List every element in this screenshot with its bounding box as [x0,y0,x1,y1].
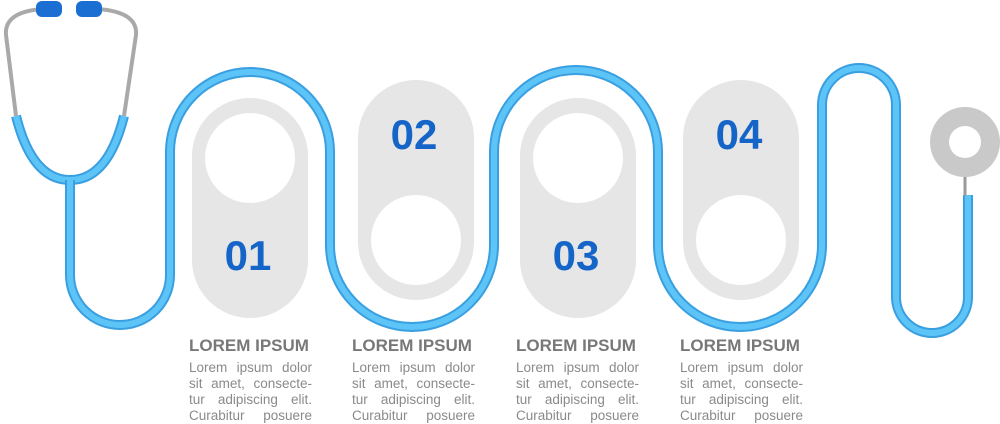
text block 4: Lorem [680,360,718,375]
text block 3 [516,336,639,423]
text block 1: sit [189,376,202,391]
text block 3: adipiscing [545,392,605,407]
stethoscope tube [70,68,968,333]
pill 4: 04 [716,111,763,158]
text block 4: dolor [773,360,803,375]
text block 2: ipsum [400,360,436,375]
text block 4: LOREM IPSUM [680,336,800,355]
text block 1: LOREM IPSUM [189,336,309,355]
text block 4 [680,336,803,423]
text block 3: elit. [618,392,639,407]
text block 4: sit [680,376,694,391]
pill 1: 01 [225,232,271,279]
text block 4: consecte- [744,376,803,391]
text block 2: elit. [454,392,475,407]
text block 3: posuere [590,408,639,423]
text block 4: ipsum [728,360,764,375]
text block 2: consecte- [416,376,475,391]
text block 1: adipiscing [218,392,278,407]
text block 1: consecte- [253,376,312,391]
pill 2 [358,80,474,300]
text block 1: Lorem [189,360,227,375]
pill 4 [683,80,799,300]
text block 4: posuere [754,408,803,423]
text block 1: amet, [211,376,245,391]
stethoscope headset [6,1,136,180]
text block 2: dolor [445,360,475,375]
text block 3: Lorem [516,360,554,375]
text block 1: tur [189,392,205,407]
text block 4: Curabitur [680,408,736,423]
text block 2: Curabitur [352,408,408,423]
text block 3: amet, [538,376,572,391]
text block 3: Curabitur [516,408,572,423]
text block 1: elit. [291,392,312,407]
pill 2: 02 [391,111,437,158]
text block 1: posuere [263,408,312,423]
text block 3: tur [516,392,532,407]
text block 4: elit. [782,392,803,407]
text block 4: adipiscing [709,392,769,407]
text block 1: dolor [282,360,312,375]
text block 2: LOREM IPSUM [352,336,472,355]
text block 1: Curabitur [189,408,245,423]
text block 3: LOREM IPSUM [516,336,636,355]
pill 3 [520,98,636,318]
text block 4: amet, [702,376,736,391]
text block 2: amet, [374,376,408,391]
text block 2 [352,336,475,423]
text block 4: tur [680,392,696,407]
text block 2: tur [352,392,368,407]
text block 2: sit [352,376,366,391]
text block 3: consecte- [580,376,639,391]
text block 3: sit [516,376,530,391]
chestpiece [930,107,1000,196]
text block 2: adipiscing [381,392,441,407]
pill 1 [192,98,308,318]
pill 3: 03 [553,232,599,279]
text block 1 [189,336,312,423]
text block 3: ipsum [564,360,600,375]
text block 1: ipsum [237,360,273,375]
text block 2: Lorem [352,360,390,375]
text block 2: posuere [426,408,475,423]
text block 3: dolor [609,360,639,375]
